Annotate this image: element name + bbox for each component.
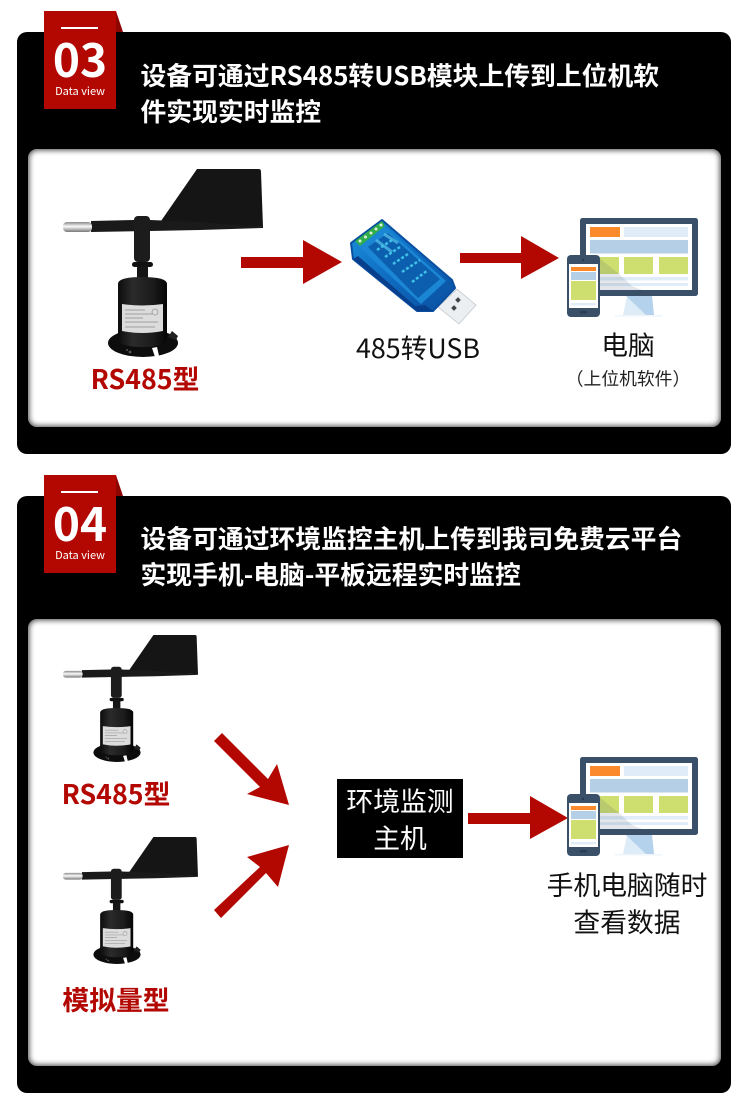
arrow: lower diagonal xyxy=(214,845,289,918)
black panel background xyxy=(17,496,731,1093)
label: RS485 type: RS485型 xyxy=(62,773,170,812)
badge 04: 04 xyxy=(53,489,107,555)
badge fold xyxy=(116,475,123,496)
badge 03 xyxy=(44,11,116,109)
heading 04: 实现手机-电脑-平板远程实时监控 xyxy=(140,555,521,592)
label: analog type: 模拟量型 xyxy=(62,979,170,1018)
badge 03: 03 xyxy=(53,25,107,91)
label: computer: 电脑 xyxy=(601,324,655,363)
panel: white card 03 xyxy=(28,149,721,427)
text: view data anytime xyxy=(547,864,707,940)
arrow: upper diagonal xyxy=(214,733,289,805)
black panel background xyxy=(17,32,731,454)
icon: wind vane sensor xyxy=(63,169,263,357)
label: 485 to USB: 485转USB xyxy=(356,327,480,366)
text: view data anytime: 查看数据 xyxy=(573,901,681,940)
badge fold xyxy=(116,11,123,32)
badge 04 xyxy=(44,475,116,573)
heading 04: 设备可通过环境监控主机上传到我司免费云平台 xyxy=(140,519,682,556)
heading 04 xyxy=(140,519,682,592)
heading 03 xyxy=(140,56,659,128)
arrow: converter to computer xyxy=(460,236,559,279)
arrow: sensor to converter xyxy=(241,240,342,284)
icon: wind vane sensor analog xyxy=(63,837,198,964)
icon: RS485 to USB converter xyxy=(350,219,476,324)
label: RS485 type: RS485型 xyxy=(91,358,199,397)
box: environment monitoring host: 主机 xyxy=(373,817,427,856)
icon: computer and phone xyxy=(567,757,698,856)
box: environment monitoring host xyxy=(337,779,463,858)
arrow: host to devices xyxy=(468,796,567,839)
section 03 xyxy=(17,11,731,454)
heading 03: 件实现实时监控 xyxy=(140,92,321,128)
heading 03: 设备可通过RS485转USB模块上传到上位机软 xyxy=(140,56,659,92)
icon: wind vane sensor RS485 xyxy=(63,635,198,762)
label: host software: （上位机软件） xyxy=(566,365,690,391)
text: view data anytime: 手机电脑随时 xyxy=(547,864,707,903)
icon: computer and phone xyxy=(567,218,698,317)
box: environment monitoring host: 环境监测 xyxy=(346,780,454,819)
panel: white card 04 xyxy=(28,619,721,1066)
badge 04: Data view xyxy=(55,547,105,563)
section 04 xyxy=(17,475,731,1093)
badge 03: Data view xyxy=(55,83,105,99)
